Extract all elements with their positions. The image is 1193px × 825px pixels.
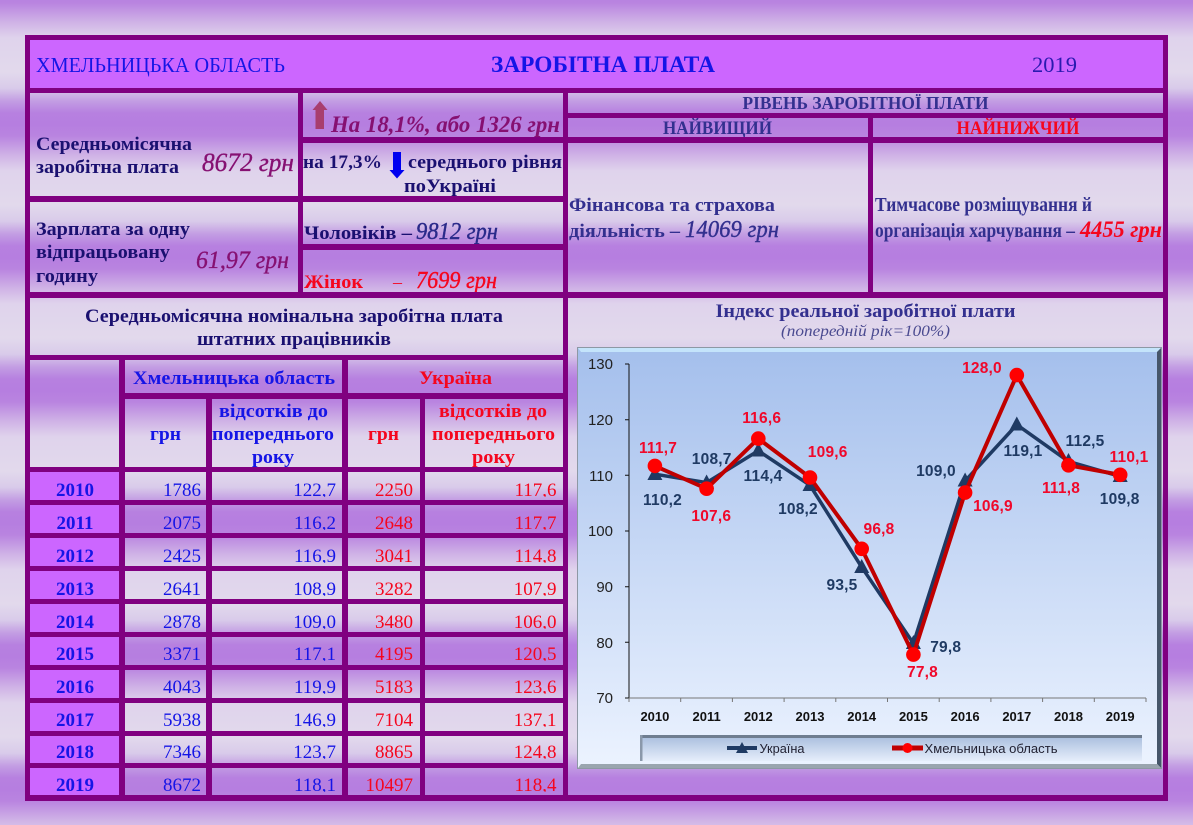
- table values: 5938: [163, 710, 201, 731]
- y axis: 90: [596, 579, 613, 596]
- table values: 4195: [375, 644, 413, 665]
- panel: men wage: Чоловіків –: [304, 224, 413, 244]
- x axis: [629, 698, 1146, 724]
- panel: average monthly wage: [30, 93, 298, 196]
- table values: 137,1: [514, 710, 556, 731]
- data labels: Khmelnytskyi region: 107,6: [691, 508, 731, 525]
- table values: 120,5: [514, 644, 556, 665]
- table values: 122,7: [293, 480, 336, 501]
- table values: 7104: [375, 710, 414, 731]
- table values: 117,1: [294, 644, 336, 665]
- x axis: 2010: [640, 709, 669, 724]
- x axis: 2017: [1002, 709, 1031, 724]
- data labels: Khmelnytskyi region: [639, 360, 1149, 681]
- line chart: real wage index: [577, 347, 1162, 769]
- table values: 3282: [375, 579, 413, 600]
- table values: 114,8: [514, 546, 556, 567]
- table values: 117,7: [514, 513, 556, 534]
- x axis: 2016: [951, 709, 980, 724]
- table column headers: грн: [150, 424, 181, 445]
- table values: 10497: [366, 775, 413, 796]
- legend: Хмельницька область: [924, 741, 1058, 756]
- panel: women wage: –: [392, 272, 403, 292]
- y axis: [588, 356, 629, 707]
- table values: 8672: [163, 775, 201, 796]
- panel: average monthly wage: Середньомісячна: [36, 135, 192, 155]
- icon: down arrow: [390, 152, 404, 178]
- y axis: 100: [588, 523, 613, 540]
- data labels: Khmelnytskyi region: 110,1: [1110, 449, 1149, 466]
- chart heading: (попередній рік=100%): [781, 323, 950, 340]
- data labels: Ukraine: 108,2: [778, 501, 818, 518]
- heading: lowest: НАЙНИЖЧИЙ: [956, 117, 1080, 139]
- legend: [640, 735, 1142, 761]
- table year column: 2012: [56, 546, 94, 567]
- panel: lowest wage sector: 4455 грн: [1079, 217, 1162, 243]
- panel: highest wage sector: 14069 грн: [685, 217, 779, 243]
- panel: lowest wage sector: Тимчасове розміщування й: [875, 195, 1092, 216]
- data labels: Ukraine: 114,4: [744, 468, 783, 485]
- panel: hourly wage: [30, 202, 298, 292]
- panel: men wage: 9812 грн: [416, 219, 498, 245]
- data labels: Ukraine: [643, 433, 1140, 656]
- table column headers: року: [252, 447, 295, 468]
- heading: lowest: [873, 117, 1163, 139]
- panel: lowest wage sector: організація харчування –: [875, 221, 1075, 242]
- panel: compared with Ukraine: [303, 143, 563, 197]
- data labels: Ukraine: 108,7: [692, 451, 732, 468]
- table values: 107,9: [514, 579, 556, 600]
- panel: hourly wage: 61,97 грн: [196, 245, 289, 274]
- table year column: [30, 472, 119, 796]
- table values: 106,0: [514, 612, 556, 633]
- data labels: Khmelnytskyi region: 77,8: [907, 664, 938, 681]
- region name: ХМЕЛЬНИЦЬКА ОБЛАСТЬ: [36, 53, 285, 77]
- panel: growth over previous year: [303, 93, 563, 138]
- table values: 108,9: [293, 579, 336, 600]
- data labels: Ukraine: 119,1: [1004, 443, 1043, 460]
- panel: compared with Ukraine: на 17,3%: [303, 153, 382, 173]
- panel: wage level heading: РІВЕНЬ ЗАРОБІТНОЇ ПЛАТИ: [742, 93, 989, 113]
- table values: 2648: [375, 513, 413, 534]
- panel: highest wage sector: Фінансова та страхова: [569, 196, 775, 216]
- data labels: Khmelnytskyi region: 111,7: [639, 440, 677, 457]
- table values: 118,1: [294, 775, 336, 796]
- panel: average monthly wage: 8672 грн: [202, 147, 294, 177]
- table values: 2641: [163, 579, 201, 600]
- header band: [30, 40, 1163, 88]
- table values: 3041: [375, 546, 413, 567]
- table column headers: попереднього: [212, 424, 334, 445]
- y axis: 110: [589, 468, 613, 485]
- table values: 3371: [163, 644, 201, 665]
- table year column: 2016: [56, 677, 94, 698]
- table year column: 2019: [56, 775, 94, 796]
- heading: highest: [568, 117, 868, 139]
- table values: 146,9: [293, 710, 336, 731]
- icon: up arrow: [312, 101, 328, 129]
- panel: compared with Ukraine: поУкраїні: [404, 177, 496, 197]
- data labels: Ukraine: 93,5: [827, 577, 858, 594]
- table values: 5183: [375, 677, 413, 698]
- table values: 2075: [163, 513, 201, 534]
- panel: women wage: Жінок: [304, 273, 363, 293]
- legend: Україна: [760, 741, 805, 756]
- data labels: Khmelnytskyi region: 106,9: [973, 498, 1013, 515]
- panel: hourly wage: годину: [36, 267, 99, 287]
- chart frame: [577, 347, 1162, 769]
- panel: hourly wage: відпрацьовану: [36, 243, 171, 263]
- table values: 4043: [163, 677, 201, 698]
- x axis: 2014: [847, 709, 877, 724]
- panel: men wage: [303, 202, 563, 245]
- table values: 109,0: [293, 612, 336, 633]
- data labels: Ukraine: 110,2: [643, 492, 682, 509]
- year: 2019: [1032, 52, 1077, 77]
- y axis: 80: [596, 635, 613, 652]
- panel: hourly wage: Зарплата за одну: [36, 220, 191, 240]
- panel: women wage: 7699 грн: [416, 268, 497, 294]
- table values: 123,6: [514, 677, 556, 698]
- x axis: 2011: [692, 709, 721, 724]
- table column headers: [125, 360, 563, 468]
- table year column: 2018: [56, 742, 94, 763]
- panel: women wage: [303, 250, 563, 294]
- table column headers: Україна: [419, 368, 493, 389]
- data labels: Khmelnytskyi region: 109,6: [808, 444, 848, 461]
- panel: average monthly wage: заробітна плата: [36, 158, 179, 178]
- table values: [163, 480, 557, 796]
- table values: 123,7: [293, 742, 336, 763]
- table column headers: відсотків до: [219, 401, 328, 422]
- chart heading: Індекс реальної заробітної плати: [716, 301, 1016, 322]
- table values: 3480: [375, 612, 413, 633]
- table values: 118,4: [514, 775, 557, 796]
- series: Ukraine: [647, 416, 1128, 649]
- data labels: Ukraine: 112,5: [1066, 433, 1105, 450]
- table year column: 2013: [56, 579, 94, 600]
- panel: compared with Ukraine: середнього рівня: [408, 153, 562, 173]
- table values: 116,2: [294, 513, 336, 534]
- data labels: Ukraine: 79,8: [930, 639, 961, 656]
- panel: highest wage sector: [568, 143, 868, 292]
- x axis: 2015: [899, 709, 928, 724]
- table year column: 2014: [56, 612, 94, 633]
- series: Khmelnytskyi region: [648, 368, 1127, 662]
- table values: 117,6: [514, 480, 556, 501]
- table values: 7346: [163, 742, 201, 763]
- x axis: 2018: [1054, 709, 1083, 724]
- y axis: 70: [596, 690, 613, 707]
- table column headers: попереднього: [432, 424, 555, 445]
- panel: growth over previous year: На 18,1%, або 1326 грн: [330, 112, 560, 138]
- chart heading: [568, 298, 1163, 344]
- panel: wage level heading: [568, 93, 1163, 113]
- table year column: 2010: [56, 480, 94, 501]
- heading: highest: НАЙВИЩИЙ: [663, 117, 773, 139]
- table values: 119,9: [294, 677, 336, 698]
- table values: 124,8: [514, 742, 556, 763]
- table values: 8865: [375, 742, 413, 763]
- table heading: штатних працівників: [197, 330, 391, 350]
- data labels: Ukraine: 109,0: [916, 463, 956, 480]
- data labels: Khmelnytskyi region: 96,8: [864, 521, 895, 538]
- table values: 2250: [375, 480, 413, 501]
- panel: lowest wage sector: [873, 143, 1163, 292]
- table column headers: року: [472, 447, 516, 468]
- data labels: Khmelnytskyi region: 128,0: [962, 360, 1002, 377]
- panel: highest wage sector: діяльність –: [569, 222, 681, 242]
- data labels: Khmelnytskyi region: 111,8: [1042, 480, 1080, 497]
- table values: 1786: [163, 480, 201, 501]
- table values: 2425: [163, 546, 201, 567]
- data labels: Khmelnytskyi region: 116,6: [742, 410, 781, 427]
- table year column: 2015: [56, 644, 94, 665]
- x axis: 2019: [1106, 709, 1135, 724]
- data labels: Ukraine: 109,8: [1100, 491, 1140, 508]
- y axis: 130: [588, 356, 613, 373]
- y axis: 120: [588, 412, 613, 429]
- table heading: [30, 298, 563, 355]
- table column headers: грн: [368, 424, 399, 445]
- main title: ЗАРОБІТНА ПЛАТА: [491, 52, 715, 77]
- table year column: 2017: [56, 710, 94, 731]
- x axis: 2013: [796, 709, 824, 724]
- table year column: 2011: [57, 513, 93, 534]
- table column headers: Хмельницька область: [133, 368, 335, 389]
- table heading: Середньомісячна номінальна заробітна плата: [85, 307, 503, 327]
- table values: 116,9: [294, 546, 336, 567]
- table column headers: відсотків до: [439, 401, 547, 422]
- table values: 2878: [163, 612, 201, 633]
- x axis: 2012: [744, 709, 773, 724]
